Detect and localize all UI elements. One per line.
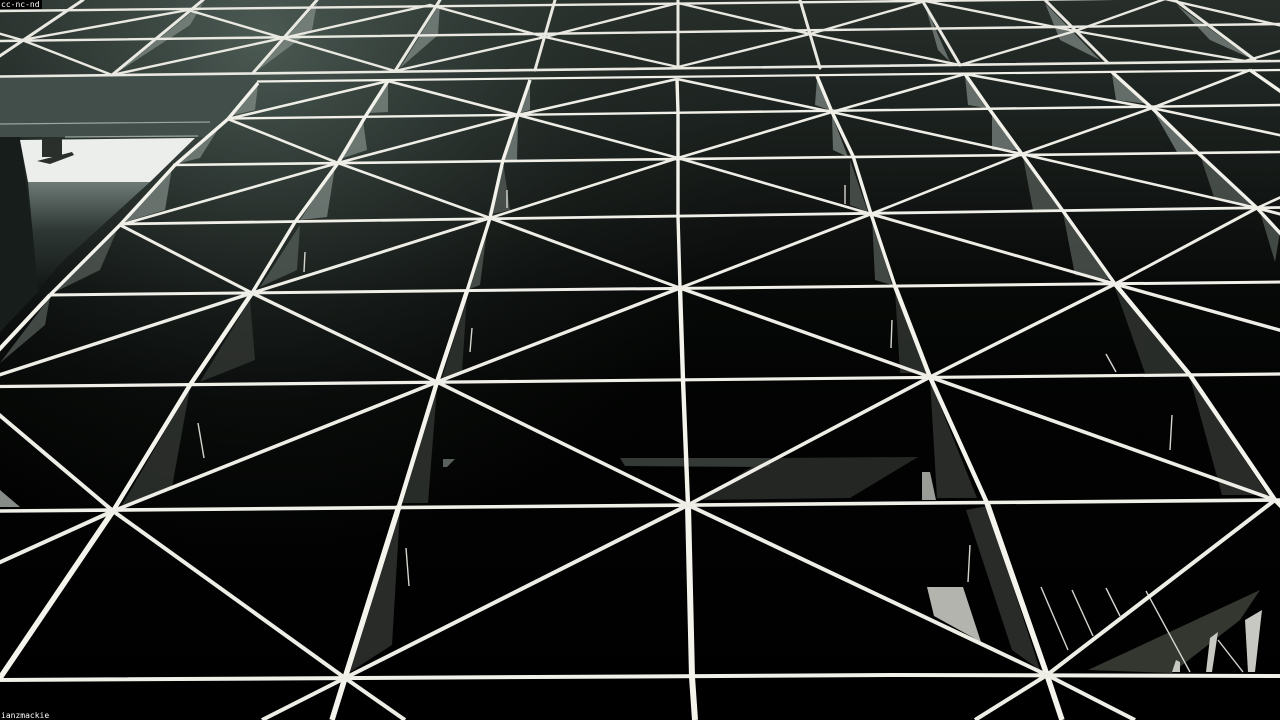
pale wood strip bbox=[927, 587, 981, 642]
distant beam band bbox=[620, 458, 770, 467]
hanging spikes lower right bbox=[1172, 610, 1262, 672]
solid beam at upper left bbox=[0, 74, 258, 137]
upper grid lines bbox=[0, 0, 1280, 76]
lit beam behind centre bbox=[699, 457, 918, 500]
upper left haze bbox=[0, 0, 1000, 720]
main grid columns lower bbox=[0, 284, 1280, 720]
lit beam lower right bbox=[1088, 590, 1260, 673]
wall below window bbox=[28, 182, 150, 290]
pale wood strip upper bbox=[922, 472, 936, 500]
mid side walls bbox=[0, 155, 1280, 363]
credit: photographer tag: ianzmackie bbox=[1, 711, 49, 720]
hanger pins bbox=[198, 185, 1243, 672]
lower side walls bbox=[122, 288, 1268, 672]
grey wedge by centre left bbox=[443, 459, 455, 467]
dark post below beam bbox=[0, 137, 40, 332]
grey wedge at left edge bbox=[0, 490, 20, 507]
beam edge lines bbox=[0, 122, 210, 137]
bright upper side walls bbox=[118, 3, 1250, 222]
bracket in window bbox=[37, 139, 74, 164]
credit: licence tag: cc-nc-nd bbox=[1, 0, 40, 9]
bright window bbox=[20, 138, 195, 182]
main grid columns upper bbox=[50, 70, 1280, 295]
